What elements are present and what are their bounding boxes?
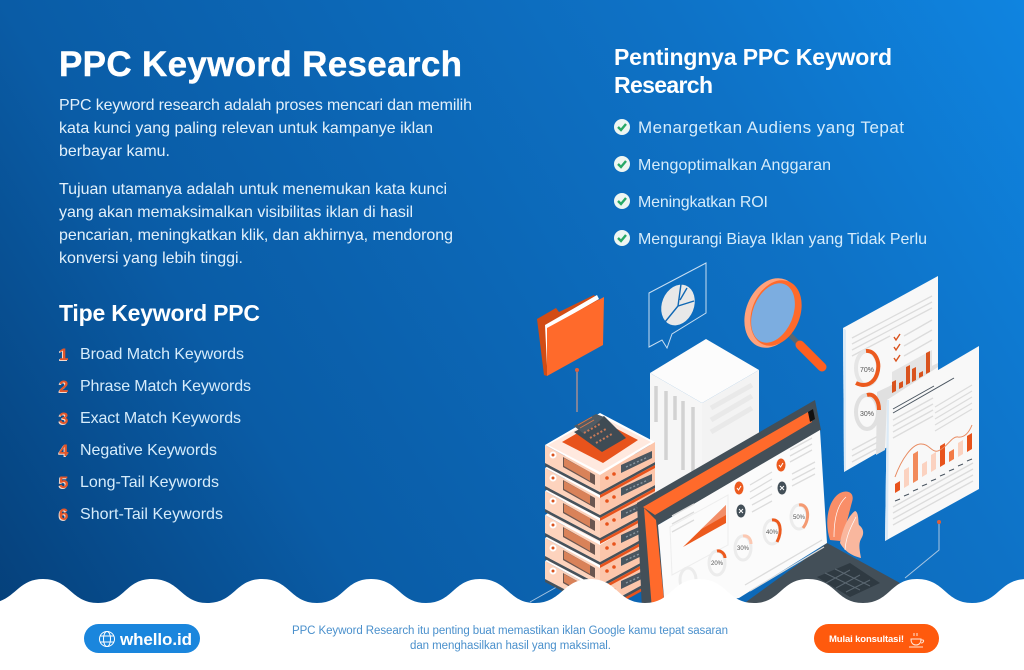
document: report with donuts: 70%: [860, 367, 874, 374]
laptop: [637, 400, 900, 610]
list: keyword types: 1: [59, 345, 68, 364]
list: importance checks: Menargetkan Audiens yang Tepat: [638, 118, 904, 137]
footer message: [292, 625, 728, 652]
list: keyword types: 6: [58, 506, 67, 525]
intro paragraph: berbayar kamu.: [59, 143, 170, 160]
consultation button: [814, 624, 939, 653]
goal paragraph: [59, 181, 453, 267]
server stack with calculator: [545, 413, 655, 614]
screen content: 30%: [737, 546, 750, 552]
title: PPC Keyword Research: [59, 45, 462, 84]
list: keyword types: 4: [58, 442, 68, 461]
intro paragraph: kata kunci yang paling relevan untuk kampanye iklan: [59, 120, 433, 137]
goal paragraph: pencarian, meningkatkan klik, dan akhirnya, mendorong: [59, 227, 453, 244]
connector pin lines: [530, 520, 941, 602]
screen content: 50%: [793, 515, 806, 521]
heading: importance: [614, 44, 892, 98]
icon: coffee cup: [909, 633, 924, 647]
list: keyword types: Exact Match Keywords: [80, 410, 241, 427]
list: keyword types: 5: [58, 474, 67, 493]
heading: importance: Research: [614, 72, 713, 98]
consultation button: Mulai konsultasi!: [829, 634, 904, 645]
list: importance checks: Mengoptimalkan Anggaran: [638, 157, 831, 174]
screen content: 20%: [711, 561, 724, 567]
list: keyword types: Broad Match Keywords: [80, 346, 244, 363]
list: keyword types: 3: [58, 410, 67, 429]
wave footer background: [0, 579, 1024, 670]
list: keyword types: Negative Keywords: [80, 442, 217, 459]
list: keyword types: 5: [59, 473, 68, 492]
list: keyword types: 4: [59, 441, 69, 460]
plant leaves: [827, 491, 863, 558]
list: keyword types: Long-Tail Keywords: [80, 474, 219, 491]
list: importance checks: [614, 118, 927, 248]
heading: importance: Pentingnya PPC Keyword: [614, 44, 892, 70]
list: keyword types: 2: [58, 378, 67, 397]
intro paragraph: [59, 97, 472, 160]
list: keyword types: [58, 345, 251, 525]
list: keyword types: 3: [59, 409, 68, 428]
goal paragraph: konversi yang lebih tinggi.: [59, 250, 243, 267]
goal paragraph: yang akan memaksimalkan visibilitas iklan di hasil: [59, 204, 413, 221]
footer message: PPC Keyword Research itu penting buat memastikan iklan Google kamu tepat sasaran: [292, 625, 728, 637]
server tower: [650, 339, 759, 520]
website pill: whello.id: [119, 630, 192, 649]
list: keyword types: Phrase Match Keywords: [80, 378, 251, 395]
icon: folder: [537, 295, 604, 412]
goal paragraph: Tujuan utamanya adalah untuk menemukan kata kunci: [59, 181, 447, 198]
document: report with bar chart: [885, 346, 979, 541]
list: keyword types: 6: [59, 505, 68, 524]
list: keyword types: Short-Tail Keywords: [80, 506, 223, 523]
list: keyword types: 2: [59, 377, 68, 396]
icon: globe: [100, 632, 114, 646]
screen content: 40%: [766, 530, 779, 536]
document: report with donuts: [843, 276, 938, 472]
intro paragraph: PPC keyword research adalah proses mencari dan memilih: [59, 97, 472, 114]
heading: keyword types: Tipe Keyword PPC: [59, 300, 260, 326]
footer message: dan menghasilkan hasil yang maksimal.: [410, 640, 611, 652]
document: report with donuts: 30%: [860, 411, 874, 418]
icon: chat bubble with pie chart: [649, 263, 706, 348]
list: keyword types: 1: [58, 346, 67, 365]
illustration: data analytics isometric: [530, 263, 979, 614]
screen content: [670, 438, 824, 592]
website pill: [84, 624, 200, 653]
magnifying glass: [734, 270, 822, 367]
list: importance checks: Mengurangi Biaya Iklan yang Tidak Perlu: [638, 231, 927, 248]
list: importance checks: Meningkatkan ROI: [638, 194, 768, 211]
